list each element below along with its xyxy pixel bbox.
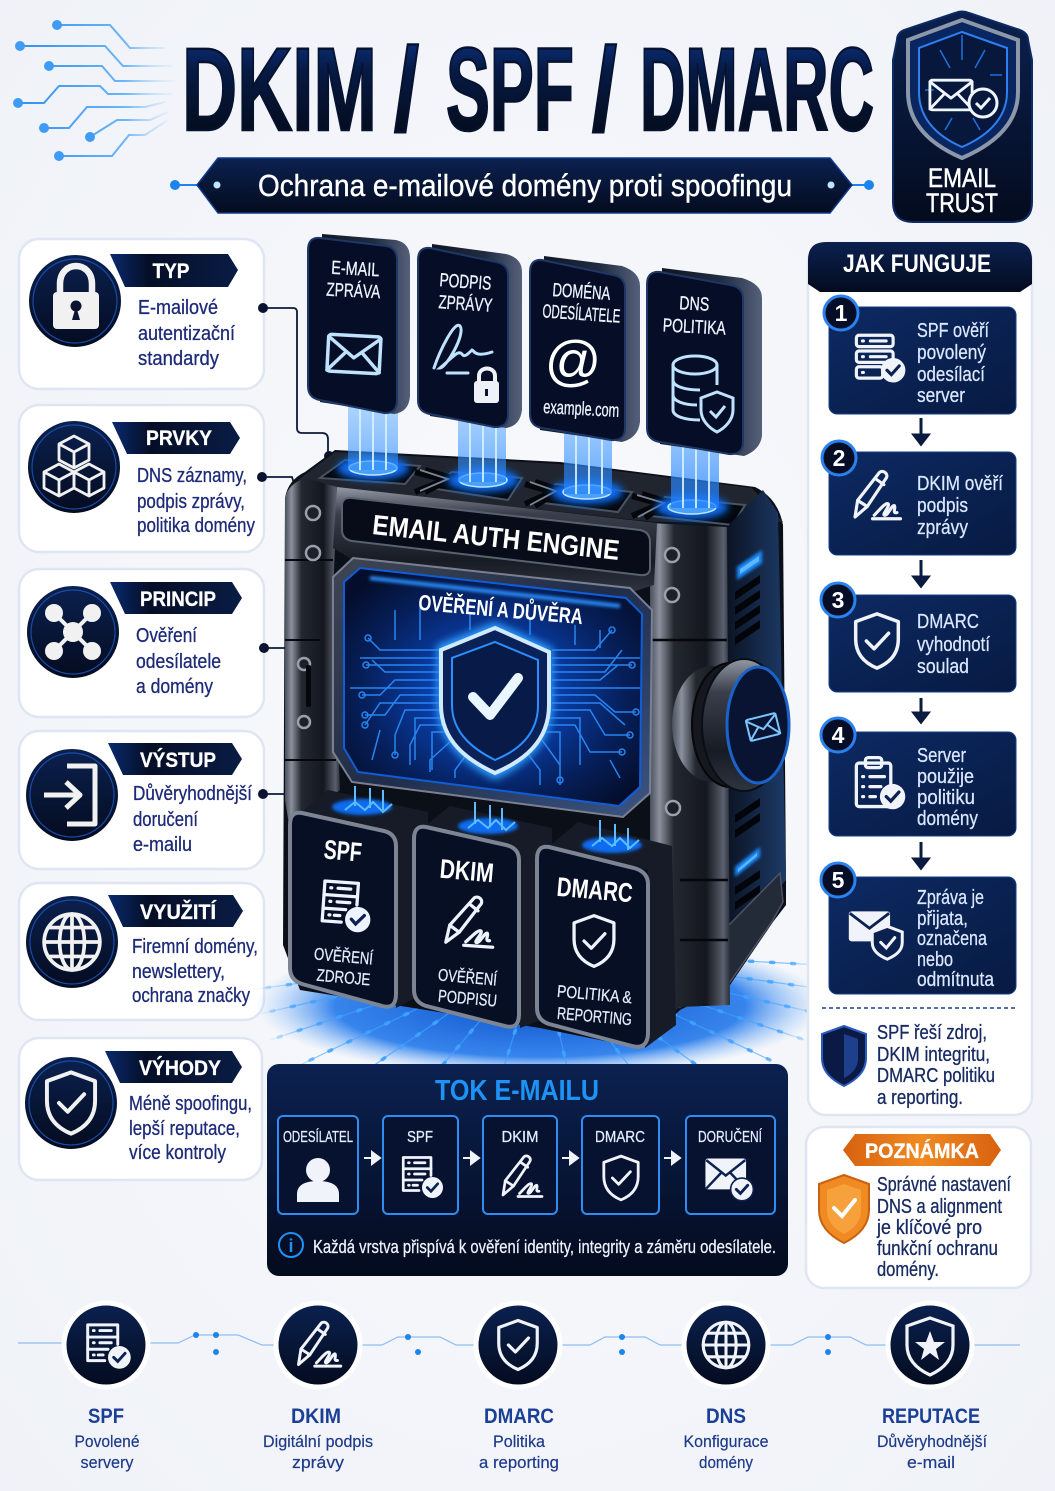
flow box: odesilatel: ODESÍLATEL bbox=[283, 1127, 353, 1146]
step 2: zprávy bbox=[917, 517, 968, 539]
panel: vyuziti: ochrana značky bbox=[132, 985, 250, 1007]
panel: prvky: PRVKY bbox=[146, 427, 212, 450]
module: dkim: OVĚŘENÍ bbox=[437, 965, 498, 990]
panel: typ: TYP bbox=[152, 260, 190, 283]
beams from cards to engine bbox=[348, 405, 719, 508]
step 2 bbox=[822, 441, 1016, 555]
panel: typ: E-mailové bbox=[138, 297, 218, 319]
bottom item: spf bbox=[64, 1303, 148, 1472]
icon: shield check bbox=[47, 1072, 95, 1134]
panel: vyuziti: VYUŽITÍ bbox=[140, 900, 217, 924]
step 3: vyhodnotí bbox=[917, 634, 990, 656]
summary note: SPF řeší zdroj, bbox=[877, 1022, 987, 1044]
info line: i bbox=[288, 1236, 294, 1256]
bottom item: dmarc: Politika bbox=[493, 1432, 546, 1451]
step 1: SPF ověří bbox=[917, 320, 989, 342]
floor glow bbox=[250, 933, 830, 1080]
module: dkim: PODPISU bbox=[437, 986, 498, 1011]
step 1: odesílací bbox=[917, 364, 985, 386]
summary note bbox=[822, 1022, 995, 1109]
machine base right bbox=[680, 873, 783, 1007]
panel: vyhody: lepší reputace, bbox=[129, 1118, 240, 1140]
bottom item: dmarc: a reporting bbox=[479, 1453, 559, 1472]
arrow bbox=[914, 560, 928, 586]
panel: poznamka bbox=[806, 1127, 1031, 1288]
title: SPF bbox=[446, 24, 574, 156]
machine screen: OVĚŘENÍ A DŮVĚRA bbox=[417, 587, 584, 629]
bottom item: dns: DNS bbox=[706, 1405, 746, 1428]
bottom item: spf: Povolené bbox=[74, 1432, 140, 1451]
heading: jak funguje: JAK FUNGUJE bbox=[843, 250, 991, 278]
step 5 bbox=[821, 863, 1016, 994]
badge: email trust bbox=[893, 12, 1032, 222]
screen circuit pattern bbox=[350, 606, 640, 785]
icon: login arrow bbox=[44, 766, 95, 824]
panel: vyuziti: Firemní domény, bbox=[132, 936, 258, 958]
icon: at sign: @ bbox=[545, 329, 601, 392]
module: dkim: DKIM bbox=[439, 854, 495, 888]
panel: prvky: DNS záznamy, bbox=[137, 465, 247, 487]
icon: signature and lock bbox=[434, 325, 499, 403]
icon: lock bbox=[53, 266, 99, 329]
card: domena odesilatele: DOMÉNA bbox=[552, 280, 611, 305]
panel: poznamka: Správné nastavení bbox=[877, 1174, 1011, 1196]
step 4: 4 bbox=[832, 722, 845, 748]
step 2: DKIM ověří bbox=[917, 473, 1003, 495]
badge: email trust: EMAIL bbox=[928, 163, 996, 193]
step 4: domény bbox=[917, 808, 978, 830]
bottom item: dmarc: DMARC bbox=[484, 1405, 554, 1428]
machine: email auth engine bbox=[283, 450, 789, 1048]
panel: tok e-mailu bbox=[267, 1064, 788, 1276]
step 2: podpis bbox=[917, 495, 968, 517]
title bbox=[182, 24, 874, 156]
card: podpis zpravy: PODPIS bbox=[439, 270, 492, 295]
machine header plate: EMAIL AUTH ENGINE bbox=[371, 509, 621, 566]
machine top surface bbox=[298, 452, 783, 525]
bottom connector chain bbox=[18, 1332, 1020, 1355]
flow box: dkim: DKIM bbox=[502, 1129, 538, 1146]
step 1: povolený bbox=[917, 342, 986, 364]
step 3 bbox=[821, 583, 1016, 692]
icon: cubes bbox=[44, 436, 104, 496]
info line: Každá vrstva přispívá k ověření identity, integrity a záměru odesílatele. bbox=[313, 1237, 776, 1257]
module: dmarc: DMARC bbox=[556, 872, 634, 908]
bottom item: reputace: REPUTACE bbox=[882, 1405, 980, 1428]
panel: prvky: podpis zprávy, bbox=[137, 491, 245, 513]
machine right side panel bbox=[727, 490, 786, 950]
bottom item: reputace bbox=[877, 1303, 987, 1472]
card: dns politika: POLITIKA bbox=[662, 315, 727, 340]
step 2: 2 bbox=[833, 445, 845, 471]
machine frame left column bbox=[285, 478, 340, 830]
bottom item: spf: servery bbox=[80, 1453, 134, 1472]
icon: envelope bbox=[327, 334, 381, 374]
bottom item: reputace: Důvěryhodnější bbox=[877, 1432, 987, 1451]
module: dmarc bbox=[537, 820, 676, 1048]
module: spf bbox=[290, 786, 430, 1008]
machine screen bbox=[333, 558, 652, 817]
module: dmarc: POLITIKA & bbox=[556, 982, 633, 1007]
card: dns politika bbox=[647, 268, 762, 456]
module: spf: ZDROJE bbox=[316, 966, 371, 989]
decorative circuit lines top left bbox=[13, 20, 175, 161]
title: / bbox=[592, 24, 617, 156]
arrow bbox=[914, 842, 928, 868]
title: DKIM bbox=[182, 24, 377, 156]
summary note: DMARC politiku bbox=[877, 1065, 995, 1087]
panel: princip: Ověření bbox=[136, 625, 197, 647]
machine frame right column bbox=[650, 523, 730, 1030]
panel: typ: autentizační bbox=[138, 323, 235, 345]
panel: poznamka: je klíčové pro bbox=[876, 1217, 982, 1239]
panel: poznamka: POZNÁMKA bbox=[865, 1140, 979, 1163]
panel: vyhody: více kontroly bbox=[129, 1142, 226, 1164]
module: dmarc: REPORTING bbox=[556, 1004, 633, 1029]
flow box: odesilatel bbox=[278, 1116, 358, 1214]
panel: vystup: VÝSTUP bbox=[140, 748, 216, 772]
flow box: spf: SPF bbox=[407, 1129, 433, 1146]
panel: princip: a domény bbox=[136, 676, 213, 698]
step 5: 5 bbox=[832, 867, 845, 893]
step 5: přijata, bbox=[917, 908, 968, 930]
module: spf: SPF bbox=[323, 834, 363, 868]
step 5: Zpráva je bbox=[917, 887, 984, 909]
panel: jak funguje bbox=[808, 242, 1032, 1115]
step 5: odmítnuta bbox=[917, 969, 995, 991]
flow box: spf bbox=[383, 1116, 458, 1214]
card: podpis zpravy bbox=[418, 244, 522, 428]
icon: central shield bbox=[437, 622, 553, 780]
card: dns politika: DNS bbox=[679, 293, 710, 316]
bottom item: dns bbox=[684, 1303, 768, 1472]
card: e-mail zprava: E-MAIL bbox=[331, 258, 380, 281]
arrow bbox=[914, 418, 928, 444]
module: dkim bbox=[414, 802, 555, 1028]
bottom item: dkim: Digitální podpis bbox=[263, 1432, 373, 1451]
panel: prvky: politika domény bbox=[137, 515, 255, 537]
info line bbox=[279, 1233, 776, 1257]
panel: tok e-mailu: TOK E-MAILU bbox=[435, 1075, 599, 1107]
bottom item: dkim: DKIM bbox=[291, 1405, 341, 1428]
bottom item: reputace: e-mail bbox=[907, 1453, 955, 1472]
bottom item: dns: domény bbox=[699, 1453, 753, 1472]
machine knob bbox=[672, 659, 789, 791]
panel: princip: PRINCIP bbox=[140, 588, 216, 611]
machine top bar bbox=[333, 487, 657, 592]
card: domena odesilatele: example.com bbox=[543, 397, 620, 422]
step 3: DMARC bbox=[917, 611, 979, 633]
bottom item: dns: Konfigurace bbox=[684, 1432, 768, 1451]
card: e-mail zprava bbox=[308, 234, 410, 414]
panel: poznamka: DNS a alignment bbox=[877, 1196, 1002, 1218]
bottom item: dmarc bbox=[476, 1303, 560, 1472]
panel: vystup: e-mailu bbox=[133, 834, 192, 856]
icon: network bbox=[45, 604, 101, 660]
panel: vyuziti: newslettery, bbox=[132, 961, 225, 983]
icon: globe bbox=[44, 914, 100, 970]
connector lines left panels to machine bbox=[257, 303, 334, 799]
heading: jak funguje bbox=[808, 242, 1032, 292]
step 4: použije bbox=[917, 766, 974, 788]
panel: poznamka: domény. bbox=[877, 1259, 939, 1281]
panel: vyhody: Méně spoofingu, bbox=[129, 1093, 252, 1115]
card: domena odesilatele: ODESÍLATELE bbox=[542, 301, 621, 328]
panel: vyuziti bbox=[19, 883, 264, 1020]
bottom item: dkim bbox=[263, 1303, 373, 1472]
icon: database shield bbox=[673, 356, 733, 432]
flow box: dmarc bbox=[582, 1116, 659, 1214]
machine header plate bbox=[342, 498, 650, 575]
step 5: označena bbox=[917, 928, 988, 950]
icon: orange shield bbox=[819, 1175, 869, 1243]
panel: vystup: Důvěryhodnější bbox=[133, 783, 252, 805]
flow box: dkim bbox=[483, 1116, 557, 1214]
panel: vystup: doručení bbox=[133, 809, 198, 831]
panel: princip: odesílatele bbox=[136, 651, 221, 673]
card: e-mail zprava: ZPRÁVA bbox=[326, 280, 381, 303]
module: spf: OVĚŘENÍ bbox=[313, 944, 374, 969]
step 1: server bbox=[917, 385, 965, 407]
panel: typ: standardy bbox=[138, 348, 219, 370]
step 4 bbox=[821, 718, 1016, 836]
flow box: doruceni bbox=[686, 1116, 775, 1214]
panel: poznamka: funkční ochranu bbox=[877, 1238, 998, 1260]
flow box: doruceni: DORUČENÍ bbox=[698, 1127, 762, 1146]
step 3: soulad bbox=[917, 656, 969, 678]
arrow bbox=[914, 698, 928, 722]
panel: vyhody: VÝHODY bbox=[139, 1056, 221, 1080]
step 3: 3 bbox=[832, 587, 844, 613]
subtitle banner: Ochrana e-mailové domény proti spoofingu bbox=[258, 168, 792, 203]
bottom item: dkim: zprávy bbox=[292, 1453, 345, 1472]
panel: princip bbox=[19, 569, 264, 717]
step 1 bbox=[824, 296, 1016, 414]
badge: email trust: TRUST bbox=[926, 188, 998, 218]
summary note: DKIM integritu, bbox=[877, 1044, 990, 1066]
panel: vystup bbox=[19, 731, 264, 869]
bottom item: spf: SPF bbox=[88, 1405, 124, 1428]
machine body bbox=[283, 450, 786, 1048]
flow box: dmarc: DMARC bbox=[595, 1129, 645, 1146]
step 5: nebo bbox=[917, 949, 953, 971]
step 1: 1 bbox=[835, 300, 848, 326]
step 4: Server bbox=[917, 745, 966, 767]
panel: typ bbox=[19, 239, 264, 389]
panel: prvky bbox=[19, 405, 264, 552]
summary note: a reporting. bbox=[877, 1087, 963, 1109]
title: / bbox=[394, 24, 419, 156]
panel: vyhody bbox=[19, 1038, 262, 1180]
card: domena odesilatele bbox=[530, 256, 640, 442]
step 4: politiku bbox=[917, 787, 975, 809]
subtitle banner bbox=[170, 158, 874, 213]
card: podpis zpravy: ZPRÁVY bbox=[438, 292, 493, 317]
